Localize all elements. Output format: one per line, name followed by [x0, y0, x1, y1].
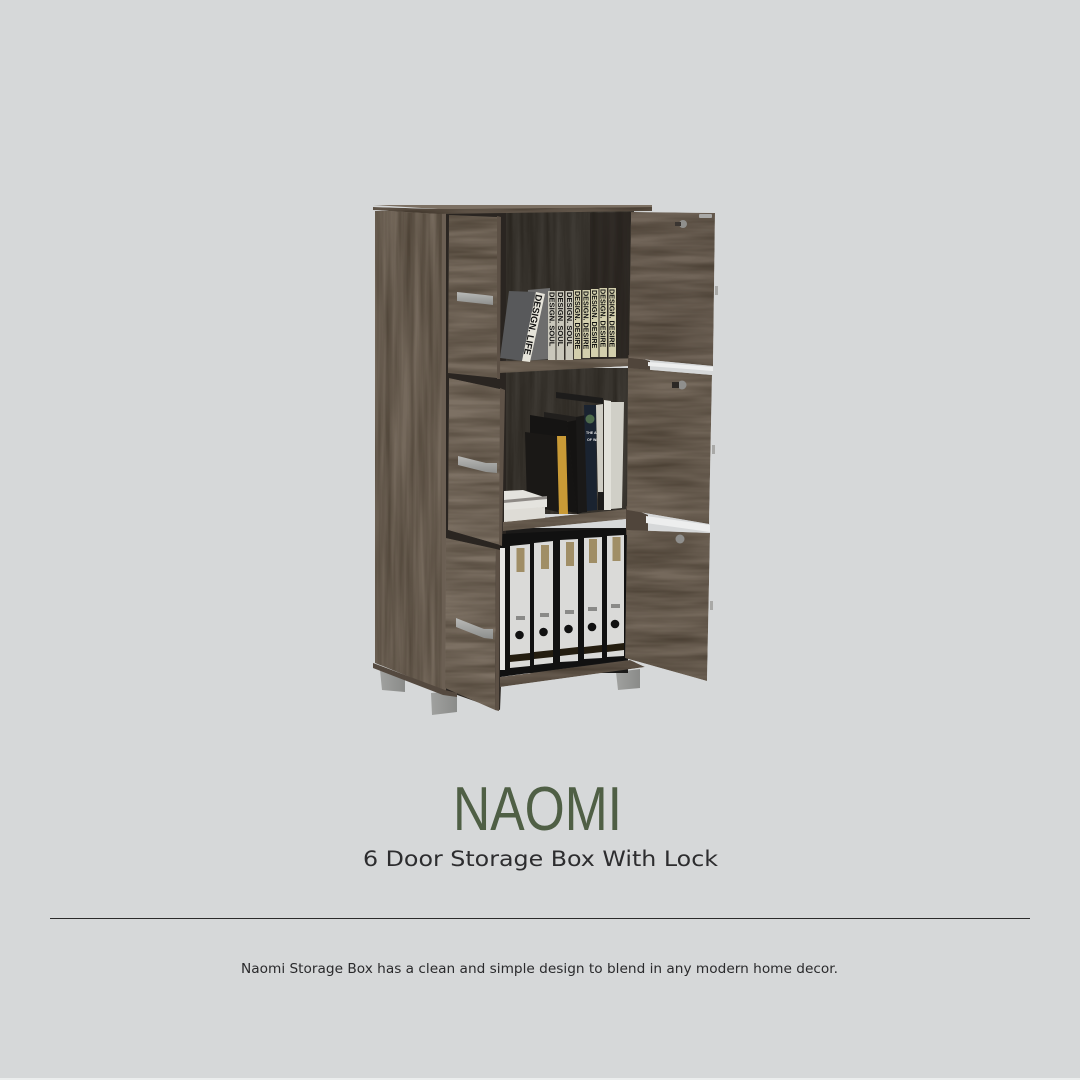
design spines: DESIGN. DESIRE	[590, 290, 599, 349]
books: top shelf	[500, 288, 616, 362]
tilted book	[500, 291, 535, 361]
flat books	[504, 490, 547, 511]
door locks and hinges	[672, 214, 718, 610]
shelves	[500, 358, 647, 687]
binders: bottom shelf	[500, 528, 626, 677]
open door: middle right	[627, 368, 712, 524]
books: middle shelf: OF WAR	[587, 438, 602, 442]
open door: bottom left	[445, 538, 500, 711]
door handles	[456, 292, 497, 639]
base plinth	[373, 663, 457, 697]
front black book and yellow spine	[525, 432, 558, 512]
open door: top left	[448, 215, 501, 379]
front frame rail	[442, 211, 446, 691]
description text: Naomi Storage Box has a clean and simple design to blend in any modern home decor.	[241, 962, 838, 977]
design spines: DESIGN. SOUL	[565, 292, 574, 347]
binder 4	[584, 537, 602, 659]
binder 5	[607, 535, 624, 657]
books: middle shelf: THE ART	[586, 431, 602, 435]
gap between side panel and doors	[443, 211, 506, 710]
binder 1	[510, 544, 530, 668]
interior back panel	[498, 211, 634, 673]
binder 3	[560, 539, 578, 662]
design spines	[548, 288, 616, 360]
product image: storage cabinet	[373, 205, 718, 715]
cabinet legs	[380, 669, 640, 715]
design spines: DESIGN. DESIRE	[598, 289, 608, 348]
design spines: DESIGN. DESIRE	[608, 289, 616, 348]
binder 2	[534, 541, 553, 665]
design spines: DESIGN. DESIRE	[582, 291, 590, 350]
open door: middle left	[448, 378, 505, 546]
design spines: DESIGN. SOUL	[556, 292, 565, 347]
divider line	[50, 918, 1030, 919]
frame behind right doors	[626, 355, 650, 535]
books: top shelf: DESIGN. LIFE	[522, 294, 545, 356]
highlight strips under doors	[646, 362, 713, 532]
back books	[567, 420, 584, 514]
design spines: DESIGN. DESIRE	[573, 291, 582, 350]
design spines: DESIGN. SOUL	[548, 292, 556, 347]
top slab	[373, 205, 652, 214]
open door: top right	[629, 212, 715, 366]
title: NAOMI	[453, 775, 622, 844]
open door: bottom right	[625, 530, 710, 681]
side panel	[375, 211, 444, 691]
subtitle: 6 Door Storage Box With Lock	[363, 847, 719, 872]
books: middle shelf	[504, 392, 624, 522]
